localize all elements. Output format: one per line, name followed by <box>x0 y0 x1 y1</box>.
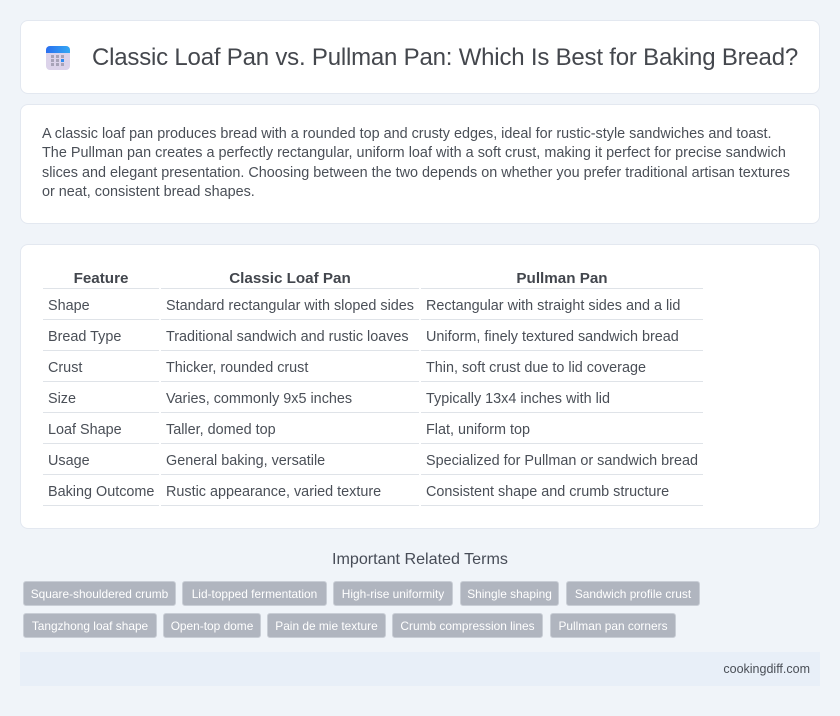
intro text: slices and elegant presentation. Choosing between the two depends on whether you prefer traditional artisan textures <box>42 165 790 181</box>
comparison table: Baking Outcome <box>48 484 154 500</box>
related terms tags: Sandwich profile crust <box>575 587 691 601</box>
intro text: A classic loaf pan produces bread with a rounded top and crusty edges, ideal for rustic-style sandwiches and toast. <box>42 126 772 142</box>
footer source label: cookingdiff.com <box>723 662 810 676</box>
comparison table: Thin, soft crust due to lid coverage <box>426 360 646 376</box>
intro text: or neat, consistent bread shapes. <box>42 184 255 200</box>
intro text <box>42 126 790 200</box>
comparison table: Varies, commonly 9x5 inches <box>166 391 352 407</box>
related terms tags: Tangzhong loaf shape <box>32 619 148 633</box>
comparison table: Feature <box>74 270 128 287</box>
title: Classic Loaf Pan vs. Pullman Pan: Which Is Best for Baking Bread? <box>92 44 798 71</box>
related terms tags: Open-top dome <box>171 619 253 633</box>
related terms tags: Shingle shaping <box>467 587 552 601</box>
comparison table: Crust <box>48 360 82 376</box>
related terms tags: Pullman pan corners <box>558 619 668 633</box>
intro text: The Pullman pan creates a perfectly rectangular, uniform loaf with a soft crust, making it perfect for precise sandwich <box>42 145 786 161</box>
comparison table <box>43 270 703 506</box>
related terms tags: Pain de mie texture <box>275 619 378 633</box>
comparison table: Typically 13x4 inches with lid <box>426 391 610 407</box>
related terms tags: Crumb compression lines <box>400 619 535 633</box>
comparison table: Shape <box>48 298 90 314</box>
comparison table: Thicker, rounded crust <box>166 360 308 376</box>
related terms tags: High-rise uniformity <box>342 587 444 601</box>
comparison table: Rectangular with straight sides and a lid <box>426 298 680 314</box>
comparison table: Usage <box>48 453 90 469</box>
footer bar <box>20 652 820 686</box>
comparison table: Taller, domed top <box>166 422 276 438</box>
related terms tags: Lid-topped fermentation <box>192 587 317 601</box>
intro panel <box>20 104 820 224</box>
related terms tags: Square-shouldered crumb <box>31 587 168 601</box>
comparison table: Classic Loaf Pan <box>229 270 351 287</box>
comparison table panel <box>20 244 820 529</box>
comparison table: Consistent shape and crumb structure <box>426 484 669 500</box>
related terms tags <box>23 581 700 638</box>
comparison table: Standard rectangular with sloped sides <box>166 298 414 314</box>
related terms heading: Important Related Terms <box>332 550 508 568</box>
comparison table: Bread Type <box>48 329 121 345</box>
comparison table: Specialized for Pullman or sandwich bread <box>426 453 698 469</box>
comparison table: Traditional sandwich and rustic loaves <box>166 329 409 345</box>
comparison table: Pullman Pan <box>516 270 608 287</box>
comparison table: General baking, versatile <box>166 453 325 469</box>
icon: calendar <box>46 46 70 70</box>
comparison table: Flat, uniform top <box>426 422 530 438</box>
title card <box>20 20 820 94</box>
comparison table: Size <box>48 391 76 407</box>
comparison table: Rustic appearance, varied texture <box>166 484 381 500</box>
comparison table: Loaf Shape <box>48 422 122 438</box>
comparison table: Uniform, finely textured sandwich bread <box>426 329 679 345</box>
